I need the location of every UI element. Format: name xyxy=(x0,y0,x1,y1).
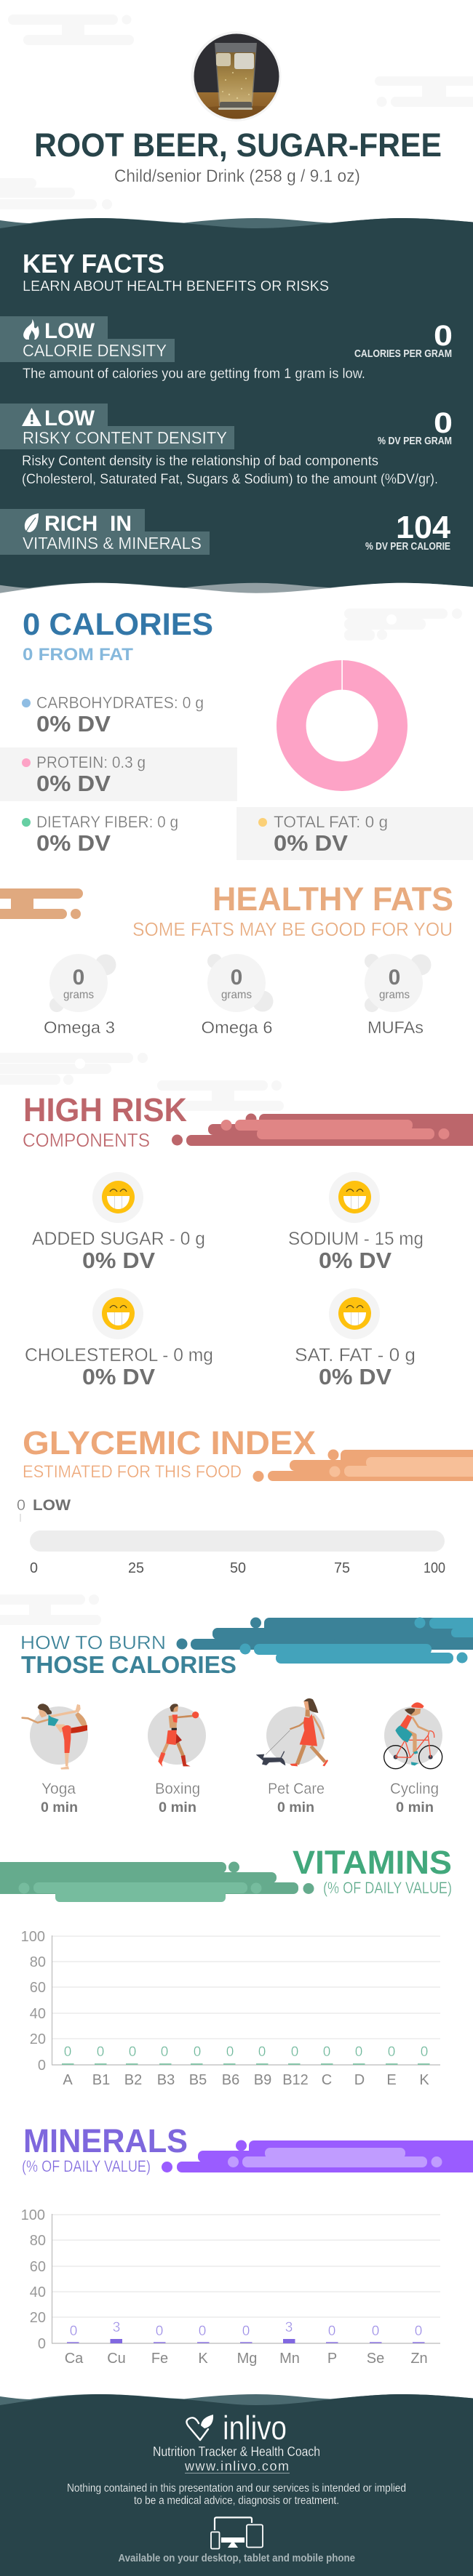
icon: woman walking dog xyxy=(256,1698,328,1766)
fact: calorie density xyxy=(0,316,453,382)
disclaimer: Nothing contained in this presentation and our services is intended or implied xyxy=(67,2482,406,2495)
fact: calorie density: CALORIES PER GRAM xyxy=(354,348,452,360)
legend: total fat xyxy=(236,807,473,860)
decorative band: glycemic index xyxy=(253,1450,473,1482)
heading: high risk: HIGH RISK xyxy=(23,1091,187,1128)
decorative band: minerals xyxy=(162,2140,473,2172)
bar chart: vitamins: B9 xyxy=(254,2072,271,2088)
icon: smiley xyxy=(102,1181,135,1213)
bar chart: minerals: 0 xyxy=(415,2324,422,2339)
subheading: components: COMPONENTS xyxy=(23,1129,150,1151)
activity: pet care xyxy=(256,1698,328,1815)
heading: healthy fats: HEALTHY FATS xyxy=(212,880,453,918)
legend: carbohydrates: 0% DV xyxy=(36,711,111,737)
legend: dietary fiber: 0% DV xyxy=(36,830,111,856)
bar chart: vitamins: K xyxy=(419,2072,429,2088)
fact: calorie density: LOW xyxy=(44,319,95,343)
icon: smiley xyxy=(338,1181,371,1213)
fact: risky content density: LOW xyxy=(44,406,95,430)
icon: leaf xyxy=(25,513,39,532)
bar chart: vitamins: 0 xyxy=(421,2045,428,2060)
legend: protein xyxy=(0,747,237,801)
item: added sugar: 0% DV xyxy=(82,1248,155,1273)
decorative band: vitamins xyxy=(0,1861,314,1902)
bar chart: minerals: 0 xyxy=(70,2324,77,2339)
activity: cycling: Cycling xyxy=(390,1781,439,1797)
bar chart: minerals: P xyxy=(327,2351,337,2367)
fact: rich in vitamins and minerals: RICH IN xyxy=(44,512,132,536)
bar chart: minerals: 0 xyxy=(328,2324,335,2339)
fact: calorie density: The amount of calories you are getting from 1 gram is low. xyxy=(23,366,365,382)
panel: calories xyxy=(0,607,473,860)
subheading: from fat: 0 FROM FAT xyxy=(23,645,133,665)
item: saturated fat xyxy=(295,1288,416,1389)
icon: yoga figure xyxy=(23,1704,87,1770)
title: ROOT BEER, SUGAR-FREE xyxy=(34,127,442,164)
website link: www.inlivo.com xyxy=(184,2459,289,2473)
bar chart: vitamins: B1 xyxy=(92,2072,110,2088)
fact: risky content density: RISKY CONTENT DENSITY xyxy=(23,428,227,447)
activity: yoga: 0 min xyxy=(41,1800,78,1815)
legend: protein: 0% DV xyxy=(36,771,111,796)
icon: devices xyxy=(211,2517,263,2549)
fact: rich in vitamins and minerals: VITAMINS & MINERALS xyxy=(23,534,202,553)
item: sodium xyxy=(288,1172,424,1273)
activity: boxing: 0 min xyxy=(159,1800,196,1815)
fact: calorie density: CALORIE DENSITY xyxy=(23,341,167,360)
fact: rich in vitamins and minerals: % DV PER CALORIE xyxy=(365,541,450,553)
panel: glycemic index xyxy=(17,1424,473,1576)
bar chart: vitamins: 0 xyxy=(226,2045,234,2060)
panel: vitamins xyxy=(0,1844,452,2088)
subheading: key facts: LEARN ABOUT HEALTH BENEFITS OR RISKS xyxy=(23,278,329,294)
activity: boxing: Boxing xyxy=(155,1781,200,1797)
item: added sugar: ADDED SUGAR - 0 g xyxy=(32,1229,205,1249)
fact: rich in vitamins and minerals: 104 xyxy=(396,510,451,545)
heading: key facts: KEY FACTS xyxy=(23,249,164,278)
heading: glycemic index: GLYCEMIC INDEX xyxy=(23,1424,316,1461)
gauge: glycemic scale: 100 xyxy=(424,1560,445,1576)
bar chart: vitamins: B5 xyxy=(189,2072,207,2088)
activity: yoga: Yoga xyxy=(41,1781,76,1797)
bar chart: vitamins: 0 xyxy=(161,2045,168,2060)
panel: minerals xyxy=(21,2122,473,2367)
donut chart xyxy=(291,659,393,777)
bar chart: minerals: 20 xyxy=(30,2310,46,2326)
icon: cyclist xyxy=(384,1702,442,1769)
bar chart: vitamins: 0 xyxy=(388,2045,395,2060)
bar chart: minerals: 60 xyxy=(30,2259,46,2275)
disclaimer xyxy=(67,2482,406,2507)
panel: high risk xyxy=(23,1091,473,1389)
bar chart: vitamins: 60 xyxy=(30,1980,46,1996)
legend: total fat: 0% DV xyxy=(274,830,348,856)
bar chart: vitamins: 0 xyxy=(38,2058,46,2074)
bar chart: vitamins: 0 xyxy=(291,2045,298,2060)
bar chart: vitamins: B3 xyxy=(157,2072,175,2088)
bar chart: minerals: Se xyxy=(367,2351,384,2367)
bar chart: vitamins: 0 xyxy=(194,2045,201,2060)
heading: how to burn: HOW TO BURN xyxy=(20,1632,166,1653)
legend: dietary fiber: DIETARY FIBER: 0 g xyxy=(36,813,178,831)
item: sodium: 0% DV xyxy=(319,1248,391,1273)
bar chart: minerals: 3 xyxy=(285,2320,293,2335)
heading: minerals: MINERALS xyxy=(23,2122,188,2159)
gauge: glycemic scale: 75 xyxy=(334,1560,350,1576)
gauge: glycemic scale: LOW xyxy=(33,1497,71,1514)
bar chart: vitamins: 0 xyxy=(64,2045,71,2060)
stat: omega 6: 0 xyxy=(231,966,242,990)
background shape: header right xyxy=(375,76,473,107)
bar chart: minerals: 80 xyxy=(30,2233,46,2249)
bar chart: vitamins: 0 xyxy=(355,2045,362,2060)
stat: mufas: 0 xyxy=(389,966,400,990)
logo: inlivo: inlivo xyxy=(223,2409,287,2447)
legend: total fat: TOTAL FAT: 0 g xyxy=(274,813,388,831)
bar chart: minerals: Ca xyxy=(65,2351,84,2367)
bar chart: minerals: 0 xyxy=(156,2324,163,2339)
fact: risky content density: 0 xyxy=(434,407,453,439)
panel: how to burn those calories xyxy=(20,1617,473,1815)
icon: flame xyxy=(23,319,39,340)
icon: warning triangle xyxy=(22,408,41,426)
background shape: header left xyxy=(8,15,134,45)
fact: risky content density: (Cholesterol, Saturated Fat, Sugars & Sodium) to the amount (%DV/gr). xyxy=(22,472,438,487)
bar chart: minerals: 100 xyxy=(21,2207,45,2223)
gauge: glycemic scale xyxy=(17,1497,445,1576)
item: sodium: SODIUM - 15 mg xyxy=(288,1229,424,1249)
panel: key facts xyxy=(0,218,473,605)
panel: footer xyxy=(0,2394,473,2576)
fact: risky content density: Risky Content density is the relationship of bad components xyxy=(22,454,378,469)
heading: those calories: THOSE CALORIES xyxy=(21,1651,236,1678)
bar chart: minerals xyxy=(21,2207,440,2367)
food photo: root beer glass xyxy=(191,31,281,121)
bar chart: vitamins: B2 xyxy=(124,2072,142,2088)
bar chart: minerals: 0 xyxy=(199,2324,206,2339)
logo: inlivo xyxy=(186,2409,287,2447)
legend: protein: PROTEIN: 0.3 g xyxy=(36,753,146,771)
background shape: mid left xyxy=(0,1053,148,1085)
stat: omega 6: grams xyxy=(221,989,252,1001)
gauge: glycemic scale: 0 xyxy=(17,1497,25,1514)
bar chart: vitamins: 100 xyxy=(21,1929,45,1945)
bar chart: vitamins: A xyxy=(63,2072,73,2088)
activity: pet care: 0 min xyxy=(277,1800,314,1815)
activity: yoga xyxy=(23,1704,88,1815)
bar chart: vitamins: B6 xyxy=(222,2072,239,2088)
activity: cycling: 0 min xyxy=(396,1800,434,1815)
panel: healthy fats xyxy=(0,880,453,1037)
subheading: healthy fats: SOME FATS MAY BE GOOD FOR YOU xyxy=(132,918,453,940)
bar chart: vitamins: 80 xyxy=(30,1954,46,1970)
item: added sugar xyxy=(32,1172,205,1273)
stat: mufas xyxy=(365,954,431,1037)
disclaimer: to be a medical advice, diagnosis or treatment. xyxy=(134,2495,339,2507)
icon: boxing figure xyxy=(158,1704,199,1767)
bar chart: vitamins: E xyxy=(386,2072,397,2088)
fact: risky content density xyxy=(0,404,453,487)
bar chart: vitamins: 0 xyxy=(258,2045,266,2060)
activity: pet care: Pet Care xyxy=(268,1781,325,1797)
stat: mufas: grams xyxy=(379,989,410,1001)
bar chart: vitamins xyxy=(21,1929,440,2088)
bar chart: vitamins: B12 xyxy=(282,2072,309,2088)
item: cholesterol: CHOLESTEROL - 0 mg xyxy=(25,1345,213,1365)
heading: calories: 0 CALORIES xyxy=(23,607,213,642)
bar chart: minerals: 0 xyxy=(372,2324,379,2339)
bar chart: minerals: 0 xyxy=(38,2336,46,2352)
bar chart: vitamins: 0 xyxy=(97,2045,104,2060)
heading: vitamins: VITAMINS xyxy=(293,1844,452,1881)
decorative band: healthy fats xyxy=(0,888,83,919)
bar chart: minerals: 0 xyxy=(242,2324,250,2339)
gauge: glycemic scale: 0 xyxy=(30,1560,38,1576)
fact: calorie density: 0 xyxy=(434,320,453,352)
bar chart: minerals: K xyxy=(198,2351,208,2367)
decorative band: high risk xyxy=(172,1114,473,1146)
bar chart: minerals: 40 xyxy=(30,2284,46,2300)
background shape: mid centre xyxy=(157,1080,284,1111)
bar chart: vitamins: C xyxy=(322,2072,332,2088)
bar chart: minerals: Cu xyxy=(107,2351,126,2367)
bottom wave edge xyxy=(0,583,473,605)
background shape: burn left xyxy=(0,1594,101,1625)
item: saturated fat: 0% DV xyxy=(319,1364,391,1389)
availability note: Available on your desktop, tablet and mobile phone xyxy=(118,2552,355,2564)
stat: omega 3: Omega 3 xyxy=(44,1018,115,1037)
bar chart: minerals: 3 xyxy=(113,2320,120,2335)
item: saturated fat: SAT. FAT - 0 g xyxy=(295,1345,416,1365)
legend: carbohydrates: CARBOHYDRATES: 0 g xyxy=(36,694,204,712)
bar chart: vitamins: 0 xyxy=(129,2045,136,2060)
bar chart: vitamins: 0 xyxy=(323,2045,330,2060)
subheading: percent daily value: (% OF DAILY VALUE) xyxy=(22,2157,151,2175)
fact: rich in vitamins and minerals xyxy=(0,509,451,555)
item: cholesterol xyxy=(25,1288,213,1389)
subtitle: Child/senior Drink (258 g / 9.1 oz) xyxy=(114,166,360,186)
bar chart: minerals: Mn xyxy=(279,2351,300,2367)
gauge: glycemic scale: 25 xyxy=(128,1560,144,1576)
stat: omega 6: Omega 6 xyxy=(201,1018,272,1037)
stat: omega 3 xyxy=(44,954,116,1037)
bar chart: vitamins: D xyxy=(354,2072,365,2088)
legend: carbohydrates xyxy=(22,694,204,737)
bar chart: vitamins: 20 xyxy=(30,2031,46,2047)
stat: omega 6 xyxy=(201,954,274,1037)
item: cholesterol: 0% DV xyxy=(82,1364,155,1389)
subheading: estimated: ESTIMATED FOR THIS FOOD xyxy=(23,1462,242,1482)
stat: omega 3: grams xyxy=(63,989,94,1001)
stat: omega 3: 0 xyxy=(73,966,84,990)
bar chart: minerals: Fe xyxy=(151,2351,168,2367)
gauge: glycemic scale: 50 xyxy=(230,1560,246,1576)
fact: risky content density: % DV PER GRAM xyxy=(378,436,452,447)
bar chart: minerals: Zn xyxy=(410,2351,428,2367)
icon: smiley xyxy=(338,1297,371,1330)
bar chart: vitamins: 40 xyxy=(30,2006,46,2022)
bar chart: minerals: Mg xyxy=(237,2351,257,2367)
icon: smiley xyxy=(102,1297,135,1330)
legend: dietary fiber xyxy=(22,813,178,856)
background shape: header lower left xyxy=(0,178,112,209)
stat: mufas: MUFAs xyxy=(367,1018,424,1037)
decorative band: burn xyxy=(176,1617,473,1664)
activity: cycling xyxy=(384,1702,442,1815)
activity: boxing xyxy=(148,1704,206,1815)
tagline: Nutrition Tracker & Health Coach xyxy=(153,2444,320,2459)
